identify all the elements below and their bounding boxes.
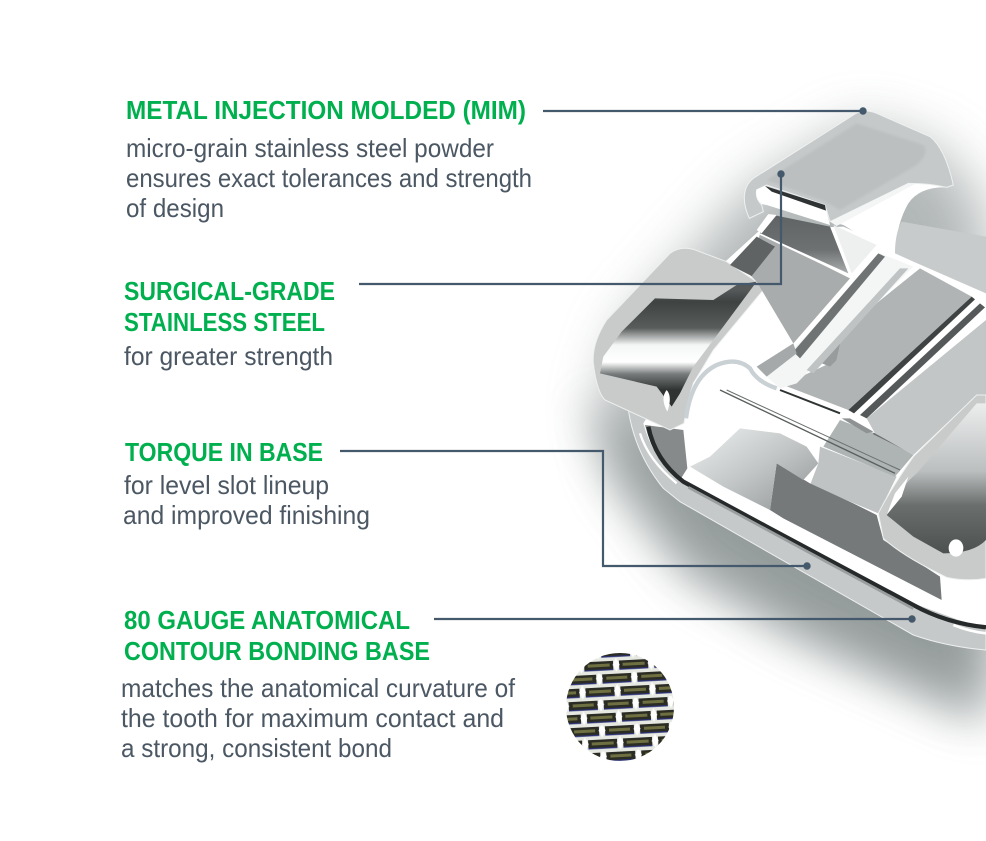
upper floor band bbox=[810, 447, 897, 513]
text block: bonding base: the tooth for maximum contact and bbox=[121, 703, 504, 733]
tie-wing: right bbox=[895, 222, 986, 293]
icon: bonding base mesh close-up bbox=[566, 653, 674, 761]
text block: metal injection molded: micro-grain stainless steel powder bbox=[126, 133, 494, 163]
text block: metal injection molded: of design bbox=[126, 193, 224, 223]
text block: metal injection molded: METAL INJECTION MOLDED (MIM) bbox=[126, 97, 526, 125]
text block: surgical-grade stainless steel: for greater strength bbox=[124, 341, 333, 371]
text block: bonding base: 80 GAUGE ANATOMICAL bbox=[124, 607, 410, 635]
text block: torque in base: and improved finishing bbox=[123, 500, 370, 530]
slot stripe bbox=[848, 297, 985, 418]
base shank bbox=[645, 425, 687, 480]
text block: bonding base: matches the anatomical curvature of bbox=[121, 673, 516, 703]
floor blob bbox=[690, 428, 818, 510]
body white interior bbox=[643, 227, 986, 630]
callout leader: bonding base bbox=[434, 616, 915, 622]
text block: torque in base bbox=[123, 439, 370, 530]
text block: metal injection molded bbox=[126, 97, 532, 223]
text block: surgical-grade stainless steel: STAINLESS STEEL bbox=[124, 309, 325, 337]
dark floor bbox=[770, 463, 942, 600]
lower rail bbox=[720, 390, 895, 473]
chrome arch bbox=[686, 362, 777, 418]
gray block under post bbox=[793, 330, 843, 367]
tie-wing: left bbox=[593, 248, 763, 430]
text block: bonding base: a strong, consistent bond bbox=[121, 733, 392, 763]
text block: torque in base: TORQUE IN BASE bbox=[125, 439, 323, 467]
text block: bonding base bbox=[121, 607, 516, 763]
central gray wedge bbox=[750, 233, 850, 343]
callout leader: metal injection molded bbox=[543, 108, 866, 114]
upper white recess bbox=[830, 183, 947, 253]
slot floor panel bbox=[783, 268, 972, 410]
text block: torque in base: for level slot lineup bbox=[124, 470, 329, 500]
text block: surgical-grade stainless steel: SURGICAL-GRADE bbox=[124, 278, 335, 306]
tie-wing: top bbox=[744, 111, 953, 222]
text block: surgical-grade stainless steel bbox=[124, 278, 335, 371]
callout leader: torque in base bbox=[340, 451, 810, 569]
white triangle behind post bbox=[833, 225, 877, 273]
upper slot dark faces bbox=[760, 214, 848, 273]
chrome rim bbox=[648, 427, 986, 627]
callout leader: surgical-grade stainless steel bbox=[359, 171, 784, 284]
central post chrome bbox=[693, 288, 795, 410]
text block: bonding base: CONTOUR BONDING BASE bbox=[124, 638, 430, 666]
tie-wing: lower right bbox=[842, 395, 986, 603]
text block: metal injection molded: ensures exact tolerances and strength bbox=[126, 163, 532, 193]
illustration: metal bracket bbox=[593, 111, 986, 650]
base flange bbox=[628, 390, 986, 650]
bracket drop shadow bbox=[590, 125, 986, 725]
